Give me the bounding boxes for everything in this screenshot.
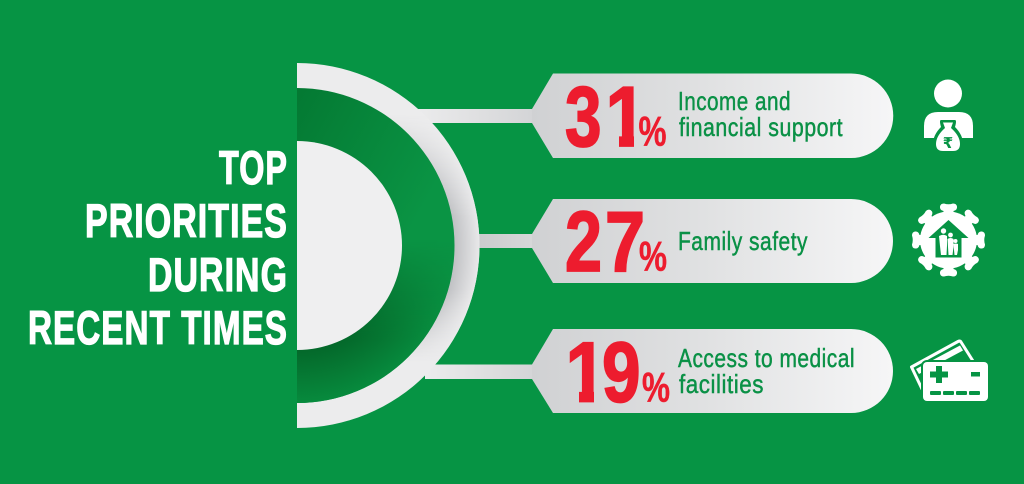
number (570, 341, 639, 404)
label (678, 86, 843, 142)
title: DURING (148, 249, 288, 302)
connector: 31% (415, 109, 540, 123)
panel: 31% income (532, 74, 894, 158)
panel: 27% family (532, 195, 893, 290)
number: 9 (602, 326, 640, 420)
number: 3 (565, 70, 602, 165)
icon: virus with family house (912, 204, 985, 276)
dark green band (297, 88, 454, 403)
panel: 19% medical (532, 329, 893, 413)
icon: medical cards (912, 341, 990, 403)
icon: person with rupee bag: ₹ (943, 134, 953, 152)
title (28, 142, 288, 355)
number: 1 (606, 70, 646, 165)
semicircle graphic (297, 63, 480, 428)
number (566, 86, 634, 148)
label: Access to medical (678, 343, 855, 373)
band lower shadow (297, 258, 454, 403)
title: PRIORITIES (85, 195, 288, 248)
connector: 27% (470, 234, 540, 248)
outer light ring (297, 63, 480, 428)
percent: % (638, 108, 666, 154)
number: 1 (566, 326, 606, 420)
icon: person with rupee bag (924, 80, 973, 153)
label: Income and (678, 86, 791, 116)
pill (532, 329, 893, 413)
label: financial support (679, 112, 843, 142)
label: facilities (679, 369, 764, 399)
connector: 19% (425, 364, 540, 379)
title: TOP (219, 142, 288, 195)
percent: % (642, 364, 670, 410)
number: 7 (605, 195, 645, 290)
percent: % (639, 232, 667, 280)
pill (532, 199, 893, 283)
pill (532, 74, 893, 158)
title: RECENT TIMES (28, 302, 288, 355)
number (565, 195, 645, 290)
label: Family safety (678, 226, 808, 256)
label (678, 343, 855, 399)
ring shading (408, 131, 480, 350)
number: 2 (565, 195, 602, 290)
inner disc (297, 141, 402, 350)
